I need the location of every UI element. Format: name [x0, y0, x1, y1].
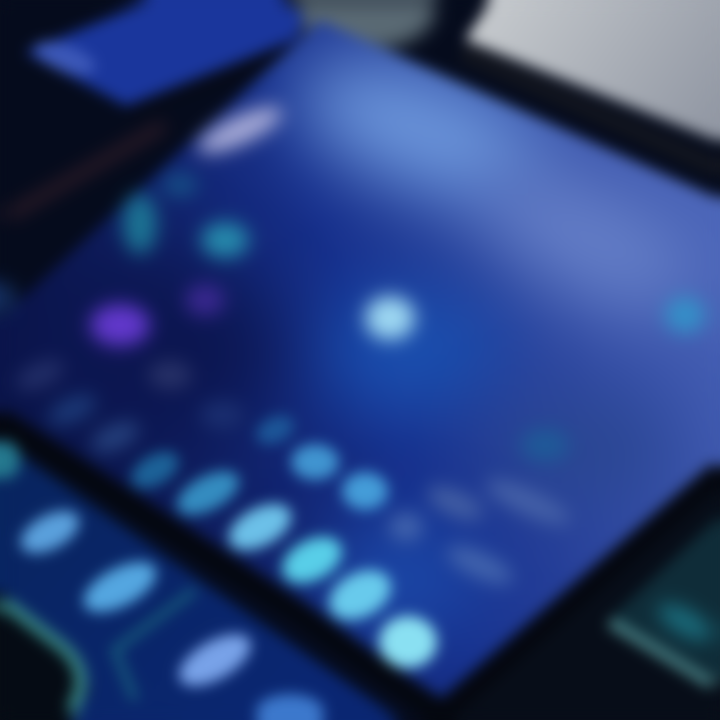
muted pill 7 [481, 472, 575, 532]
dock icon d [342, 472, 388, 510]
tablet dark lower edge [0, 419, 720, 714]
muted pill 6 [423, 479, 487, 527]
teal edge [610, 622, 712, 684]
bottom right dark wedge [440, 472, 720, 720]
lower pill 3 [171, 624, 259, 696]
muted teal [521, 429, 569, 461]
dock icon a [251, 410, 299, 450]
dock icon c [291, 444, 339, 480]
muted pill 8 [442, 539, 518, 591]
left edge dot [0, 282, 13, 314]
muted pill 2 [43, 388, 101, 432]
cyan icon [201, 222, 249, 258]
lower pill 1 [14, 502, 86, 562]
panel: lower left device [0, 441, 401, 720]
bottom left dark device [0, 590, 195, 720]
lower pill 2 [76, 551, 164, 623]
device: bottom right dark tablet [610, 515, 720, 684]
screen lighting [110, 26, 716, 648]
top right tablet dark edge [462, 52, 720, 169]
muted pill 4 [148, 361, 192, 389]
device: top left phone [25, 0, 305, 112]
red trace near phone [8, 125, 165, 216]
top centre grey glow [295, 0, 435, 50]
app icons: muted row [11, 353, 575, 591]
dock icon i [379, 616, 437, 668]
teal line centre [115, 590, 195, 700]
purple icon [90, 304, 150, 346]
central light dot [365, 296, 415, 340]
dock icon g [274, 527, 350, 593]
dock icon f [221, 494, 299, 560]
muted pill 1 [11, 353, 69, 397]
device: top right white tablet [462, 0, 720, 169]
dock icon b [125, 444, 185, 496]
teal outline left [4, 602, 81, 712]
small icon [162, 173, 198, 197]
teal icon [123, 194, 157, 254]
violet icon [185, 284, 225, 316]
left dot [0, 441, 20, 479]
dock icon h [321, 560, 399, 630]
muted pill 3 [86, 415, 144, 459]
app icons: bright dock row [0, 410, 437, 720]
right teal dot [665, 297, 705, 333]
lower pill 4 [256, 694, 324, 720]
teal highlight [653, 597, 717, 647]
muted dot [389, 513, 423, 541]
muted pill 5 [200, 401, 244, 429]
white top pill [192, 98, 288, 162]
app icons: upper row [0, 98, 705, 346]
dock icon e [170, 462, 246, 524]
